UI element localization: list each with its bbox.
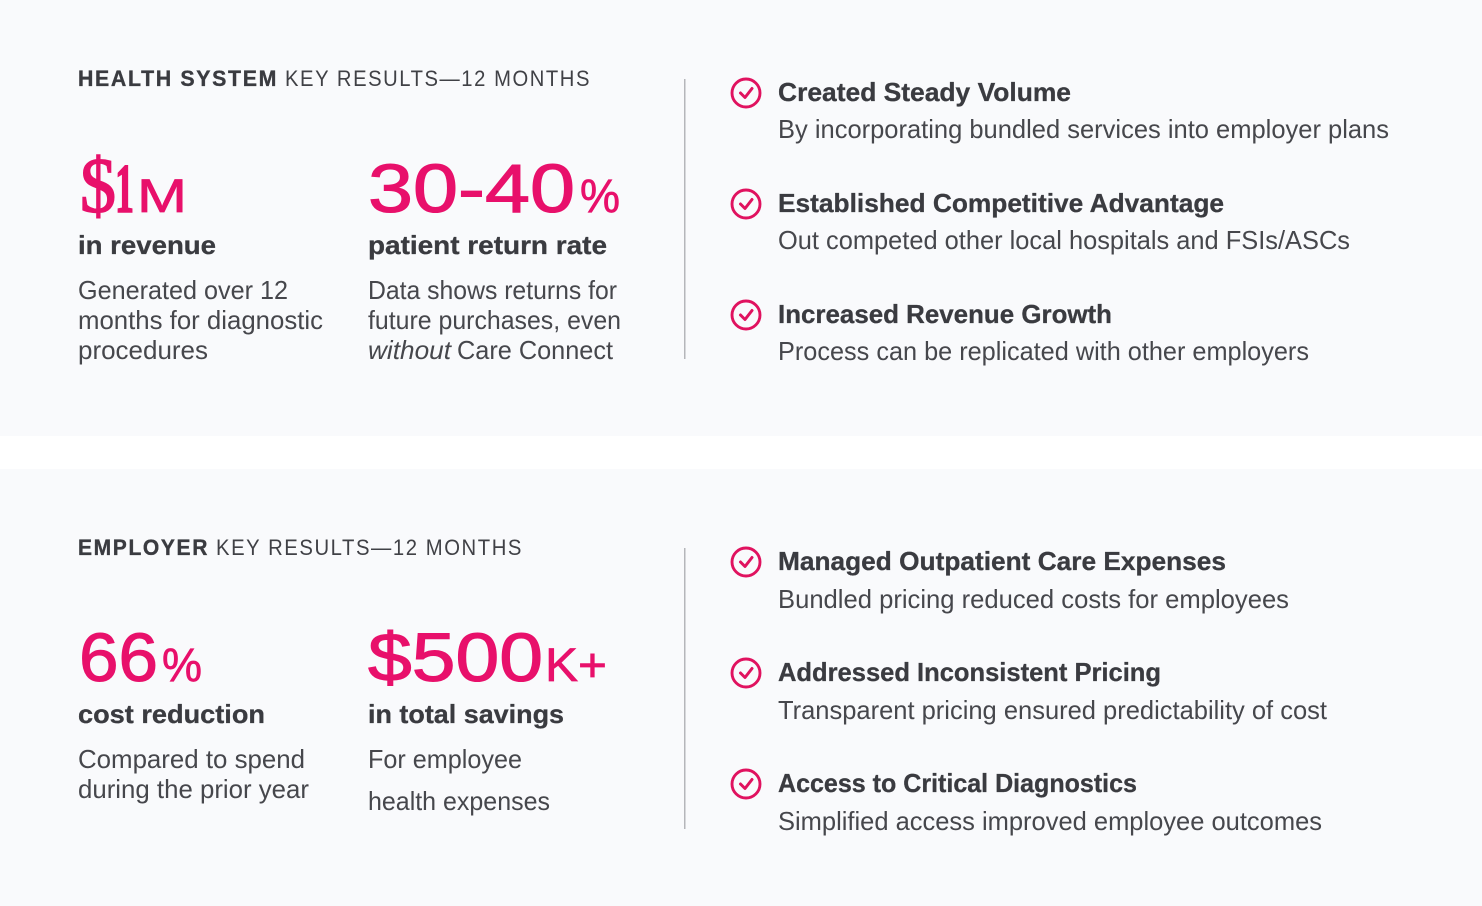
result: established competitive advantage xyxy=(732,188,1350,255)
stat: 30-40% patient return rate: Care Connect xyxy=(457,335,614,365)
icon: check circle xyxy=(732,301,760,329)
icon: check circle xyxy=(732,548,760,576)
stat: $500K+ in total savings: K+ xyxy=(545,638,607,691)
heading: health system key results: HEALTH SYSTEM xyxy=(78,66,278,91)
stat: $500K+ in total savings: in total savings xyxy=(368,699,564,729)
result: increased revenue growth: Process can be replicated with other employers xyxy=(778,336,1309,366)
stat: 66% cost reduction: cost reduction xyxy=(78,699,265,729)
stat: $1M in revenue: Generated over 12 xyxy=(78,275,288,305)
heading: health system key results: KEY RESULTS—12 MONTHS xyxy=(285,66,591,91)
stat: $1M in revenue: months for diagnostic xyxy=(78,305,323,335)
heading: employer key results: KEY RESULTS—12 MONTHS xyxy=(216,535,523,560)
icon: check circle xyxy=(732,659,760,687)
result: established competitive advantage: Out competed other local hospitals and FSIs/ASCs xyxy=(778,225,1350,255)
stat: $500K+ in total savings: $500 xyxy=(368,619,543,696)
heading: health system key results xyxy=(78,66,591,91)
stat: 66% cost reduction: during the prior year xyxy=(78,774,309,804)
stat: 30-40% patient return rate: % xyxy=(580,169,620,222)
result: addressed inconsistent pricing: Transparent pricing ensured predictability of cost xyxy=(778,695,1328,725)
stat: 30-40% patient return rate: 30-40 xyxy=(368,150,575,227)
panel: employer key results xyxy=(0,469,1482,906)
result: created steady volume xyxy=(732,77,1389,144)
stat: 30-40% patient return rate: patient return rate xyxy=(368,230,607,260)
stat: $1M in revenue xyxy=(78,142,323,365)
stat: 66% cost reduction xyxy=(78,619,309,804)
result: increased revenue growth xyxy=(732,299,1309,366)
stat: $500K+ in total savings: For employee xyxy=(368,744,522,774)
result: established competitive advantage: Established Competitive Advantage xyxy=(778,188,1224,218)
stat: 30-40% patient return rate: Data shows returns for xyxy=(368,275,617,305)
stat: 30-40% patient return rate: future purchases, even xyxy=(368,305,621,335)
result: increased revenue growth: Increased Revenue Growth xyxy=(778,299,1112,329)
result: access to critical diagnostics: Simplified access improved employee outcomes xyxy=(778,806,1322,836)
result: managed outpatient care expenses: Managed Outpatient Care Expenses xyxy=(778,546,1226,576)
heading: employer key results xyxy=(78,535,523,560)
result: managed outpatient care expenses xyxy=(732,546,1289,614)
stat: $500K+ in total savings xyxy=(368,619,607,816)
result: managed outpatient care expenses: Bundled pricing reduced costs for employees xyxy=(778,584,1289,614)
icon: check circle xyxy=(732,79,760,107)
stat: 66% cost reduction: Compared to spend xyxy=(78,744,305,774)
stat: $1M in revenue: procedures xyxy=(78,335,208,365)
icon: check circle xyxy=(732,190,760,218)
result: created steady volume: Created Steady Volume xyxy=(778,77,1071,107)
stat: 66% cost reduction: % xyxy=(162,638,202,691)
result: access to critical diagnostics: Access to Critical Diagnostics xyxy=(778,768,1137,798)
heading: employer key results: EMPLOYER xyxy=(78,535,209,560)
icon: check circle xyxy=(732,770,760,798)
stat: 30-40% patient return rate xyxy=(368,150,621,365)
stat: $1M in revenue: 1 xyxy=(115,151,134,228)
result: created steady volume: By incorporating bundled services into employer plans xyxy=(778,114,1389,144)
stat: $1M in revenue: in revenue xyxy=(78,230,216,260)
result: addressed inconsistent pricing: Addressed Inconsistent Pricing xyxy=(778,657,1161,687)
result: access to critical diagnostics xyxy=(732,768,1322,836)
stat: 66% cost reduction: 66 xyxy=(79,619,158,696)
panel: health system key results xyxy=(0,0,1482,436)
stat: $500K+ in total savings: health expenses xyxy=(368,786,550,816)
stat: $1M in revenue: $ xyxy=(80,142,116,229)
stat: $1M in revenue: M xyxy=(137,169,187,222)
stat: 30-40% patient return rate: without xyxy=(368,335,453,365)
result: addressed inconsistent pricing xyxy=(732,657,1328,725)
